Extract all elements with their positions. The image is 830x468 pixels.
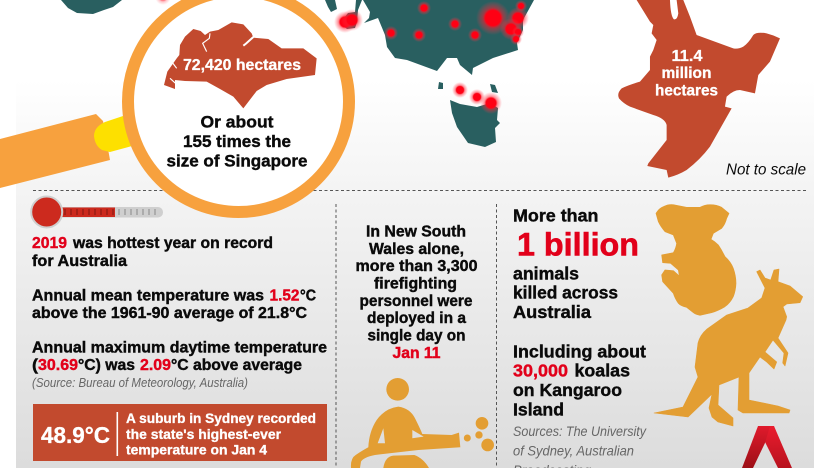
callout: 48.9°C record: 48.9°C [41,422,110,448]
fire hotspots [155,0,529,114]
label: NZ hectares: 11.4 [672,48,703,65]
magnifier comparison text: Or about [200,112,274,132]
label: NZ hectares: million [662,65,712,82]
text block: firefighting personnel: single day on [368,328,466,344]
background panel [16,80,814,468]
text block: animals killed: Sources: The University [513,423,647,439]
text block: temperature facts: °C above average [171,357,302,374]
logo: CNA [742,426,792,468]
text block: animals killed: 30,000 [513,360,568,380]
text block: temperature facts [32,235,327,390]
text block: temperature facts: ( [32,357,39,374]
text block: animals killed: Australia [513,302,591,322]
map: Australia and Tasmania [61,0,534,147]
icon: kangaroo [654,269,803,426]
text block: temperature facts: 2019 [32,235,67,252]
text block: animals killed: killed across [513,282,618,302]
text block: animals killed: on Kangaroo [513,380,622,400]
label: Singapore hectares: 72,420 hectares [183,57,301,74]
icon: firefighter with hose [351,378,494,468]
magnifier comparison text [166,112,308,170]
text block: animals killed: Including about [513,342,646,362]
text block: firefighting personnel: more than 3,300 [356,258,478,275]
text block: animals killed: koalas [574,360,630,380]
text block: temperature facts: °C) was [78,357,135,374]
text block: temperature facts: was hottest year on record [72,235,273,252]
text block: firefighting personnel: Jan 11 [392,345,441,362]
text block: temperature facts: Annual mean temperature was [32,288,264,304]
text block: temperature facts: 2.09 [140,357,171,374]
text block: firefighting personnel: In New South [366,224,466,240]
text block: temperature facts: above the 1961-90 average of 21.8°C [32,305,307,322]
text block: animals killed: of Sydney, Australian [513,442,634,458]
icon: thermometer [31,196,163,228]
text block: temperature facts: for Australia [32,253,127,270]
text block: firefighting personnel [356,224,478,362]
horizontal dashed divider [33,190,806,192]
text block: temperature facts: 30.69 [38,357,78,374]
callout: 48.9°C record: A suburb in Sydney recorded [126,411,316,426]
callout: 48.9°C record: temperature on Jan 4 [126,442,268,458]
text block: animals killed: More than [513,206,598,226]
callout: 48.9°C record: the state's highest-ever [126,427,282,442]
text block: temperature facts: 1.52 [270,288,300,304]
magnifier lens [128,0,349,212]
callout: 48.9°C record [33,404,327,461]
magnifier comparison text: size of Singapore [166,152,308,170]
text block: animals killed: animals [513,264,579,284]
text block: firefighting personnel: Wales alone, [369,241,464,258]
magnifier comparison text: 155 times the [183,132,291,151]
magnifier handle [0,114,132,188]
text block: temperature facts: °C [300,288,316,304]
text block: firefighting personnel: deployed in a [367,310,466,327]
text block: firefighting personnel: personnel were [360,293,473,310]
icon: koala [656,205,736,315]
text block: animals killed [513,206,647,468]
text block: animals killed: 1 billion [517,226,639,262]
text block: temperature facts: (Source: Bureau of Meteorology, Australia) [32,376,248,390]
note: not to scale: Not to scale [726,162,806,178]
text block: temperature facts: Annual maximum daytime temperature [32,340,327,356]
map: New Zealand North Island [618,0,780,178]
Singapore map [164,22,317,108]
text block: animals killed: Island [513,400,564,420]
label: NZ hectares [655,48,718,100]
column divider left [335,204,337,468]
column divider right [496,204,498,468]
text block: firefighting personnel: firefighting [374,276,457,292]
label: NZ hectares: hectares [655,82,718,100]
